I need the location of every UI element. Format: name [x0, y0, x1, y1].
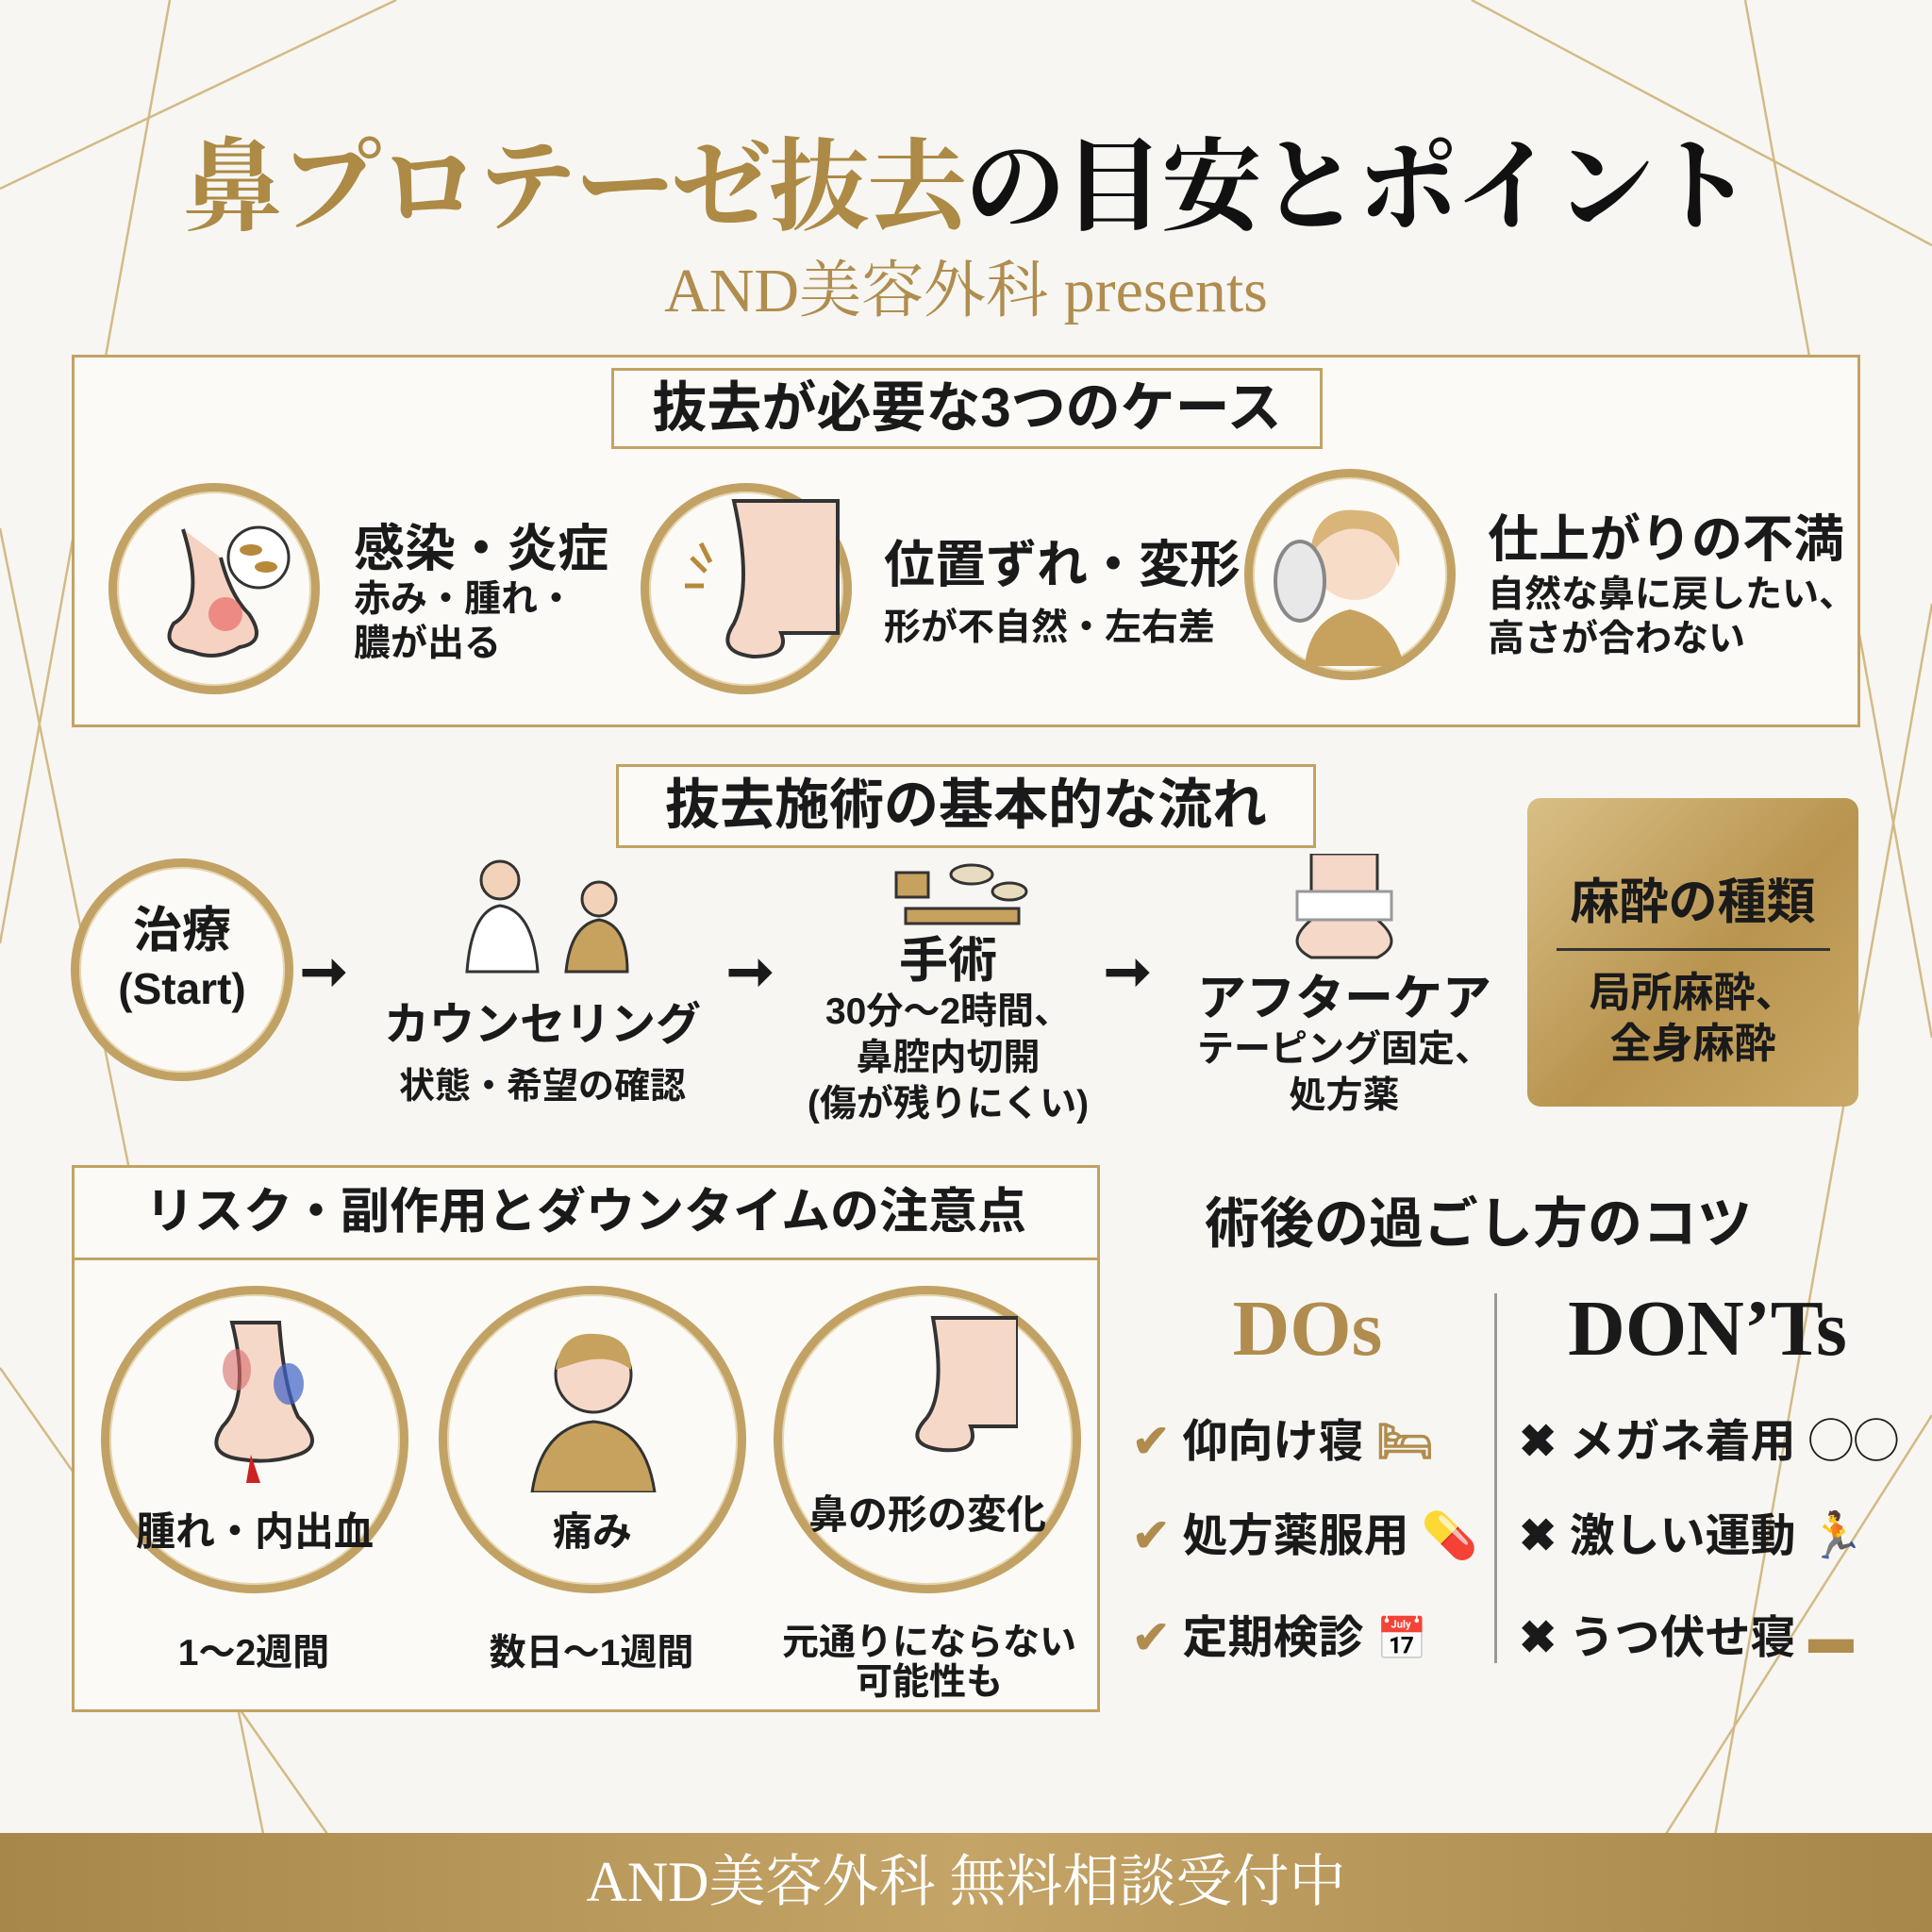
text: shape note: 元通りにならない [782, 1623, 1076, 1663]
case: infection: 赤み・腫れ・ [354, 579, 575, 620]
flow: surgery: 鼻腔内切開 [856, 1038, 1040, 1078]
panel: three cases [72, 355, 1860, 727]
text: dissatisfaction: 仕上がりの不満 [1488, 511, 1844, 568]
case: dissatisfaction: 自然な鼻に戻したい、 [1488, 575, 1856, 615]
case: infection: 膿が出る [354, 624, 501, 664]
flow: aftercare: 処方薬 [1289, 1075, 1400, 1116]
text: displacement: 位置ずれ・変形 [884, 537, 1241, 593]
icon: operating room [894, 864, 1028, 924]
flow: start: 治療 [133, 904, 231, 958]
icon: swelling circle: 腫れ・内出血 [136, 1509, 374, 1554]
case: displacement: 形が不自然・左右差 [884, 608, 1215, 648]
heading: risks: リスク・副作用とダウンタイムの注意点 [145, 1185, 1026, 1240]
heading: tips: 術後の過ごし方のコツ [1205, 1193, 1752, 1255]
risk: shape change [774, 1286, 1081, 1703]
dont: glasses: ✖ メガネ着用 ◯◯ [1519, 1417, 1899, 1467]
icon: swelling circle [101, 1286, 408, 1593]
divider [1494, 1293, 1497, 1663]
case: infection [108, 483, 608, 694]
text: infection: 感染・炎症 [354, 521, 608, 577]
do: checkup: ✔ 定期検診 📅 [1132, 1613, 1428, 1663]
flow: surgery: (傷が残りにくい) [808, 1084, 1089, 1124]
flow: counseling [384, 860, 701, 1107]
subtitle: AND美容外科 presents [664, 257, 1268, 325]
do: medicine: ✔ 処方薬服用 💊 [1132, 1511, 1478, 1561]
DOs column [1132, 1285, 1478, 1663]
flow: aftercare: テーピング固定、 [1197, 1029, 1491, 1070]
DOs column: DOs [1233, 1285, 1382, 1373]
icon: woman with mirror [1244, 469, 1456, 680]
case: displacement [641, 483, 1241, 694]
panel: anesthesia: 局所麻酔、 [1589, 970, 1796, 1016]
icon: shape circle [774, 1286, 1081, 1593]
arrow 1: ➞ [300, 940, 347, 1003]
case: dissatisfaction [1244, 469, 1856, 680]
arrow 3: ➞ [1104, 940, 1151, 1003]
flow: start [71, 858, 293, 1081]
text: surgery: 手術 [899, 934, 997, 989]
text: counseling: カウンセリング [384, 1000, 701, 1050]
heading: cases: 抜去が必要な3つのケース [652, 377, 1282, 439]
case: dissatisfaction: 高さが合わない [1488, 619, 1745, 659]
DON'Ts column: DON’Ts [1568, 1285, 1847, 1373]
text: aftercare: アフターケア [1197, 972, 1491, 1026]
footer bar [0, 1833, 1932, 1932]
icon: taped nose [1296, 854, 1392, 958]
text: swelling duration: 1〜2週間 [178, 1633, 329, 1674]
flow: aftercare [1197, 854, 1491, 1116]
flow: surgery [808, 864, 1089, 1124]
icon: doctor and patient [465, 860, 628, 974]
heading: flow [616, 764, 1316, 848]
text: shape note: 可能性も [856, 1662, 1003, 1703]
panel: anesthesia: 全身麻酔 [1609, 1021, 1775, 1067]
icon: nose side [641, 483, 852, 694]
arrow 2: ➞ [726, 940, 774, 1003]
footer bar: AND美容外科 無料相談受付中 [587, 1851, 1345, 1913]
panel: risks [72, 1165, 1100, 1712]
text: pain duration: 数日〜1週間 [490, 1633, 693, 1674]
flow: start: (Start) [118, 964, 246, 1013]
risk: pain [439, 1286, 746, 1674]
heading: flow: 抜去施術の基本的な流れ [665, 774, 1267, 836]
dont: sleep on stomach: ✖ うつ伏せ寝 ▬ [1519, 1613, 1854, 1663]
icon: pain circle: 痛み [553, 1509, 632, 1554]
icon: shape circle: 鼻の形の変化 [808, 1492, 1046, 1537]
heading: risks [75, 1168, 1097, 1260]
text: shape note [782, 1623, 1076, 1703]
DON'Ts column [1519, 1285, 1899, 1663]
risk: swelling [101, 1286, 408, 1674]
flow: surgery: 30分〜2時間、 [825, 991, 1071, 1032]
panel: anesthesia [1527, 798, 1858, 1107]
icon: pain circle [439, 1286, 746, 1593]
heading: cases [611, 368, 1323, 449]
panel: anesthesia: 麻酔の種類 [1570, 875, 1815, 930]
do: sleep on back: ✔ 仰向け寝 🛏 [1132, 1417, 1434, 1467]
flow: counseling: 状態・希望の確認 [399, 1067, 686, 1107]
title: 鼻プロテーゼ抜去の目安とポイント [182, 133, 1750, 244]
dont: exercise: ✖ 激しい運動 🏃 [1519, 1511, 1865, 1561]
icon: inflamed nose [108, 483, 320, 694]
